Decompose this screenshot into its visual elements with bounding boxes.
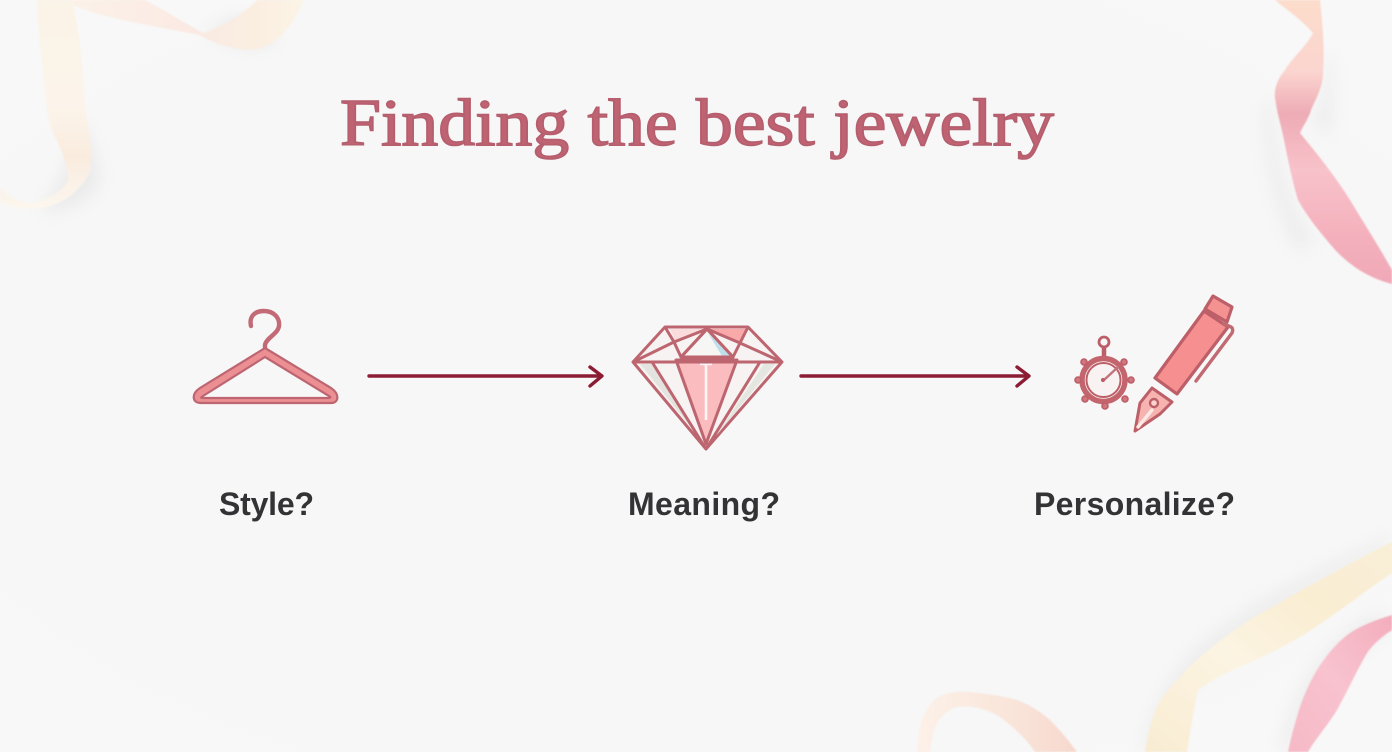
ribbon: bottom loop [917, 692, 1077, 752]
arrow: meaning to personalize [801, 367, 1029, 386]
pen clip [1196, 324, 1233, 381]
icon: hanger [194, 311, 337, 403]
title: Finding the best jewelry [340, 86, 1055, 160]
diamond body [633, 327, 782, 449]
ribbon: bottom right cream [1140, 535, 1392, 752]
arrow: style to meaning [369, 367, 602, 386]
diamond outlines [633, 327, 782, 449]
icon: stopwatch and pen [1075, 296, 1233, 431]
ribbon: top right [1263, 0, 1392, 284]
label: personalize: Personalize? [1034, 486, 1235, 522]
pen body [1155, 311, 1228, 394]
diamond crown tint [670, 329, 705, 340]
diamond side shading [640, 364, 698, 436]
stopwatch [1075, 337, 1134, 409]
diamond centre facet [676, 360, 737, 444]
icon: diamond [633, 327, 782, 449]
pen cap [1205, 296, 1232, 322]
diamond table facet [681, 329, 733, 357]
ribbon: top left [0, 0, 303, 212]
label: style: Style? [219, 486, 314, 522]
pen nib [1135, 388, 1172, 431]
ribbon: bottom right pink [1278, 612, 1392, 752]
label: meaning: Meaning? [628, 486, 780, 522]
